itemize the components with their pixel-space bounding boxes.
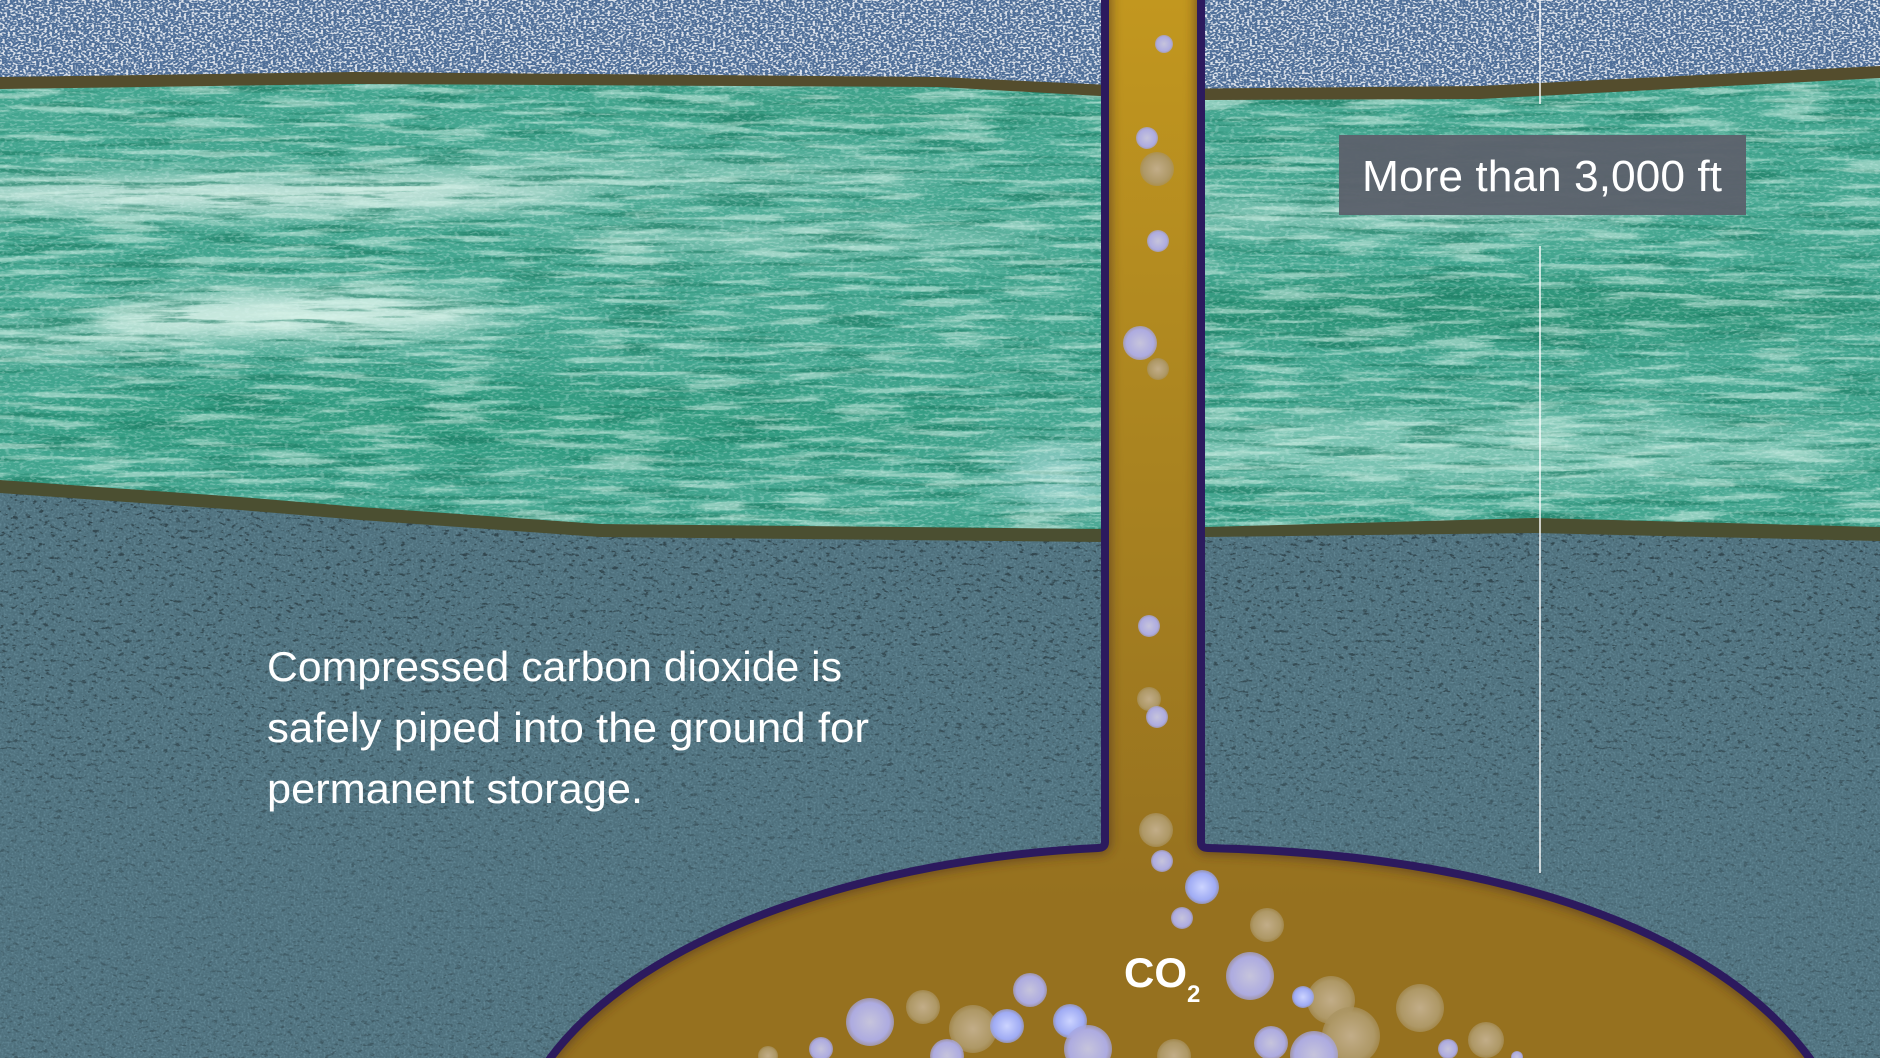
CO2 label: CO <box>1124 949 1187 996</box>
CO2 label: 2 <box>1187 981 1200 1008</box>
depth marker line <box>1539 0 1541 873</box>
CO2 bubbles rising in pipe and reservoir <box>758 35 1523 1058</box>
background: lower dark rock layer <box>0 480 1880 1058</box>
caption text: permanent storage. <box>267 765 643 812</box>
background: upper speckled rock layer <box>0 0 1880 88</box>
caption text: Compressed carbon dioxide is <box>267 643 842 690</box>
background: green sandstone rock layer <box>0 60 1880 550</box>
depth label: more than 3,000 ft: More than 3,000 ft <box>1362 152 1722 201</box>
depth label: more than 3,000 ft <box>1339 135 1746 215</box>
lower rock boundary band <box>0 480 1880 542</box>
caption text: safely piped into the ground for <box>267 704 869 751</box>
injection pipe and storage reservoir <box>549 0 1811 1058</box>
upper rock boundary band <box>0 66 1880 100</box>
